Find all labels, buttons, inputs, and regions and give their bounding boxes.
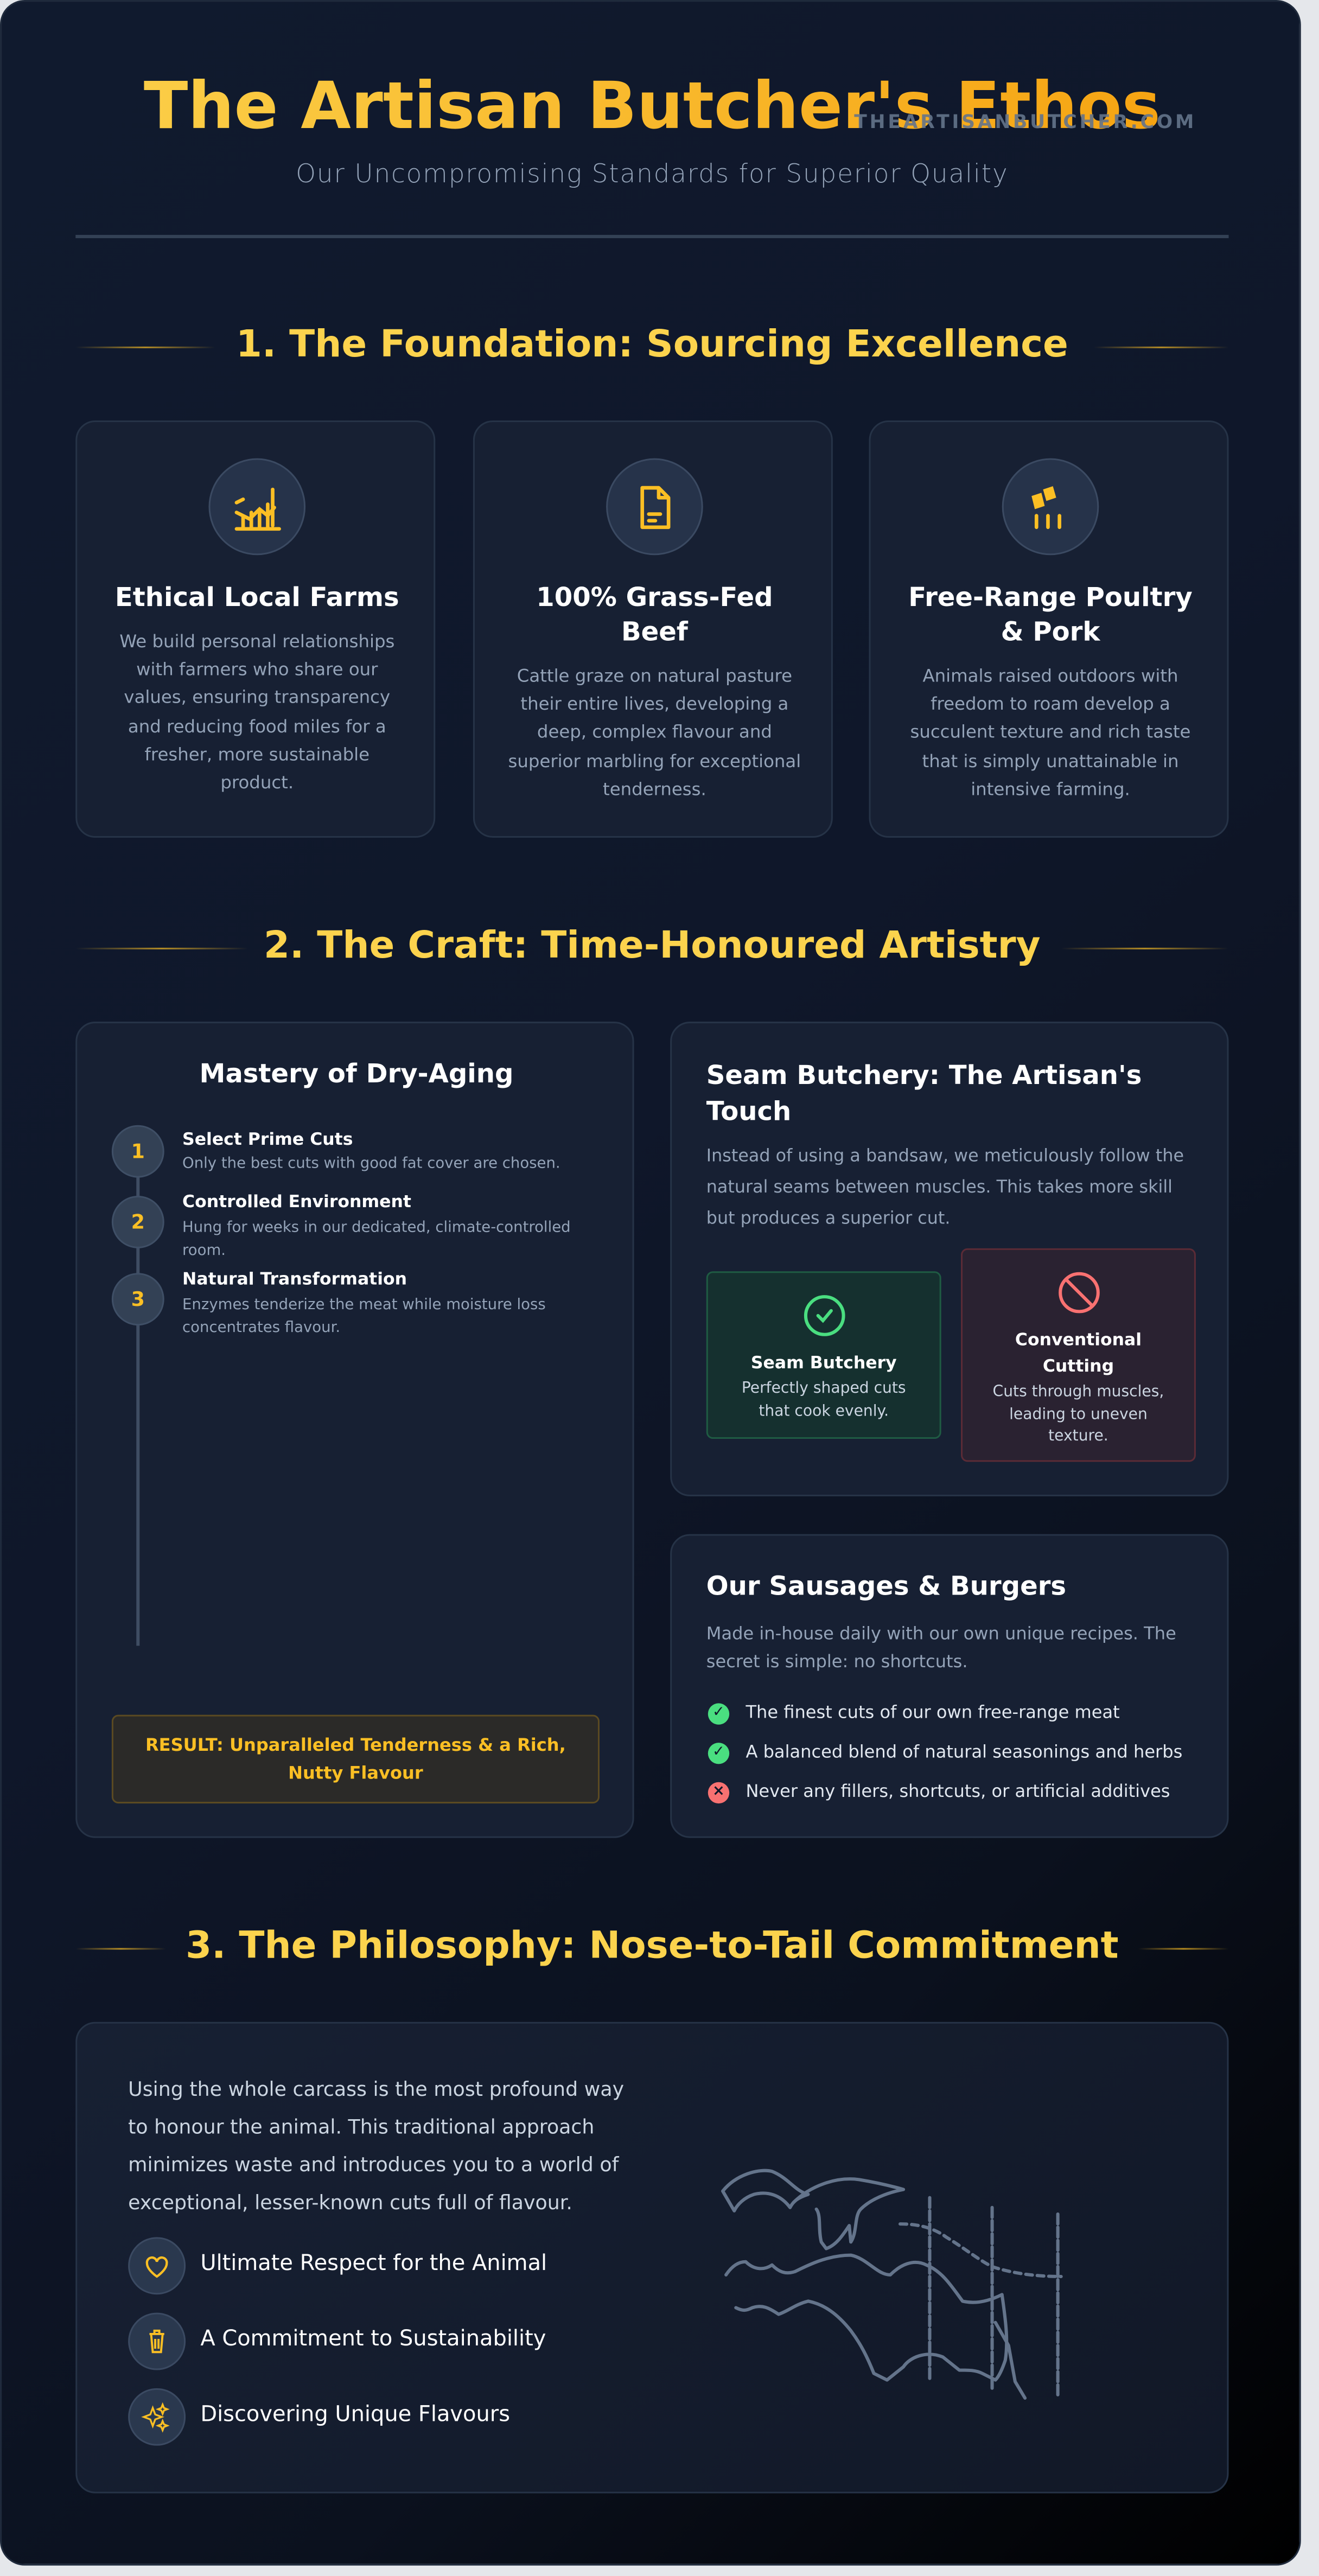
icon: farm chart xyxy=(208,458,305,555)
icon: check xyxy=(804,1295,845,1336)
item: respect xyxy=(128,2237,547,2295)
step 3: Enzymes tenderize the meat while moisture loss concentrates flavour. xyxy=(182,1298,546,1337)
step 1 xyxy=(112,1125,560,1177)
paragraph: Using the whole carcass is the most profound way to honour the animal. This traditional approach minimizes waste and introduces you to a world of exceptional, lesser-known cuts full of flavour. xyxy=(128,2078,624,2214)
description: Cattle graze on natural pasture their entire lives, developing a deep, complex flavour and superior marbling for exceptional tenderness. xyxy=(508,665,801,800)
comparison: conventional cutting: Cutting xyxy=(1043,1356,1114,1375)
title: & Pork xyxy=(1001,616,1100,647)
item: respect: Ultimate Respect for the Animal xyxy=(200,2252,547,2277)
card: ethical local farms xyxy=(75,420,435,838)
title xyxy=(908,582,1193,647)
icon: ban xyxy=(1059,1272,1100,1313)
title: The Artisan Butcher's Ethos xyxy=(144,69,1161,144)
description: Animals raised outdoors with freedom to roam develop a succulent texture and rich taste that is simply unattainable in intensive farming. xyxy=(910,665,1190,800)
heading: Our Sausages & Burgers xyxy=(706,1570,1066,1602)
watermark: THEARTISANBUTCHER.COM xyxy=(854,110,1196,133)
list item 2: A balanced blend of natural seasonings and herbs xyxy=(745,1743,1182,1762)
result callout: RESULT: Unparalleled Tenderness & a Rich, xyxy=(145,1736,566,1756)
comparison: seam butchery: that cook evenly. xyxy=(759,1402,889,1421)
step 3: Natural Transformation xyxy=(182,1270,407,1290)
card: grass-fed beef xyxy=(473,420,833,838)
step 2: Controlled Environment xyxy=(182,1193,411,1212)
icon: document xyxy=(606,458,703,555)
panel: seam butchery xyxy=(670,1022,1228,1496)
illustration: animal carcass outline xyxy=(721,2169,1063,2400)
subtitle: Our Uncompromising Standards for Superior Quality xyxy=(296,160,1009,189)
result callout xyxy=(112,1715,600,1803)
list item 3: × xyxy=(712,1784,725,1800)
item: sustainability xyxy=(128,2312,546,2370)
icon: poultry xyxy=(1002,458,1099,555)
title: Free-Range Poultry xyxy=(908,582,1193,613)
section heading 3: 3. The Philosophy: Nose-to-Tail Commitment xyxy=(186,1925,1119,1968)
comparison: conventional cutting: Conventional xyxy=(1015,1330,1142,1350)
comparison: conventional cutting xyxy=(961,1248,1196,1462)
description: We build personal relationships with farmers who share our values, ensuring transparency and reducing food miles for a fresher, more sustainable product. xyxy=(119,631,394,793)
item: sustainability: A Commitment to Sustainability xyxy=(200,2328,546,2352)
panel: sausages xyxy=(670,1534,1228,1838)
step 2: Hung for weeks in our dedicated, climate-controlled room. xyxy=(182,1220,571,1260)
step 3 xyxy=(112,1270,546,1337)
step 2 xyxy=(112,1193,571,1260)
section heading 1: 1. The Foundation: Sourcing Excellence xyxy=(236,323,1068,366)
title: Ethical Local Farms xyxy=(115,582,399,613)
title xyxy=(2,64,1303,149)
title: 100% Grass-Fed xyxy=(536,582,773,613)
result callout: Nutty Flavour xyxy=(288,1763,423,1783)
heading: Seam Butchery: The Artisan's Touch xyxy=(706,1060,1142,1127)
card: free-range poultry xyxy=(869,420,1228,838)
panel: nose-to-tail xyxy=(75,2022,1228,2494)
heading: Mastery of Dry-Aging xyxy=(199,1058,513,1089)
list item 3: Never any fillers, shortcuts, or artificial additives xyxy=(745,1782,1170,1802)
comparison: conventional cutting: Cuts through muscles, xyxy=(993,1383,1164,1401)
step 1: 1 xyxy=(131,1140,145,1163)
comparison: seam butchery xyxy=(706,1271,941,1439)
title xyxy=(536,582,773,647)
description: Made in-house daily with our own unique recipes. The secret is simple: no shortcuts. xyxy=(706,1624,1176,1671)
panel: dry-aging xyxy=(75,1022,634,1838)
list item 1: The finest cuts of our own free-range meat xyxy=(745,1703,1120,1723)
item: flavours xyxy=(128,2388,510,2446)
step 2: 2 xyxy=(131,1210,145,1234)
item: flavours: Discovering Unique Flavours xyxy=(200,2403,510,2427)
comparison: seam butchery: Seam Butchery xyxy=(751,1354,897,1373)
list item 1: ✓ xyxy=(712,1705,725,1721)
list item 2: ✓ xyxy=(712,1744,725,1761)
description: Instead of using a bandsaw, we meticulously follow the natural seams between muscles. This takes more skill but produces a superior cut. xyxy=(706,1146,1184,1228)
section heading 2: 2. The Craft: Time-Honoured Artistry xyxy=(264,924,1041,967)
comparison: seam butchery: Perfectly shaped cuts xyxy=(742,1380,906,1398)
step 1: Select Prime Cuts xyxy=(182,1130,353,1150)
step 3: 3 xyxy=(131,1287,145,1311)
step 1: Only the best cuts with good fat cover are chosen. xyxy=(182,1156,560,1173)
title: Beef xyxy=(621,616,688,647)
comparison: conventional cutting: leading to uneven xyxy=(1009,1405,1148,1423)
comparison: conventional cutting: texture. xyxy=(1048,1427,1108,1445)
